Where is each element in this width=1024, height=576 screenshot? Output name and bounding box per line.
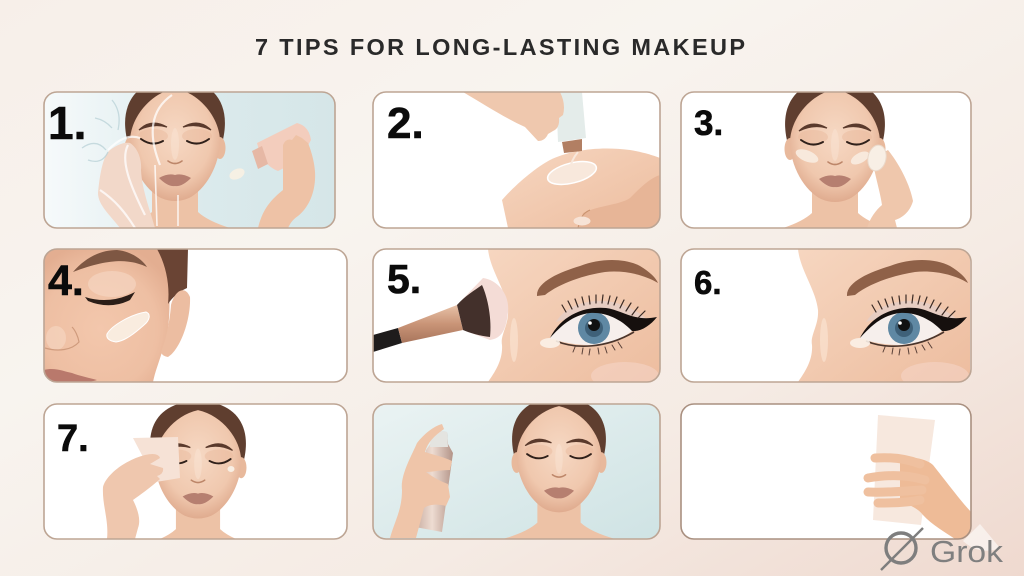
- number 7: 7.: [57, 418, 89, 460]
- serum bottle and drop: [228, 123, 311, 182]
- panel: tip 2 primer: [373, 92, 660, 228]
- panel: tip 7 blotting: [44, 400, 347, 548]
- number 6: 6.: [694, 264, 722, 301]
- title: 7 TIPS FOR LONG-LASTING MAKEUP: [255, 34, 745, 60]
- watermark: Grok: Grok: [930, 534, 1004, 569]
- fingers on tube: [463, 92, 564, 141]
- spray can: [415, 431, 453, 532]
- number 1: 1.: [48, 97, 86, 149]
- panel: tip 6 eyeliner: [681, 249, 971, 390]
- water splash and left hand: [82, 95, 178, 228]
- number 5: 5.: [387, 256, 421, 302]
- eye close-up: [488, 249, 660, 390]
- sponge: [867, 144, 887, 172]
- number 3: 3.: [694, 104, 723, 143]
- blotting sheet: [873, 415, 935, 525]
- highlight dot: [228, 466, 234, 472]
- woman's face: [150, 404, 246, 538]
- number 2: 2.: [387, 99, 424, 148]
- panel: blotting sheet: [681, 404, 971, 539]
- concealer patches: [796, 149, 868, 164]
- panel: tip 5 powder brush: [373, 249, 660, 390]
- eye close-up: [798, 249, 970, 390]
- watermark: Grok: [881, 524, 1004, 570]
- makeup brush: [373, 278, 508, 352]
- hand: [103, 454, 163, 539]
- forearm with primer swatch: [502, 148, 660, 228]
- side face: [44, 249, 190, 383]
- hand holding sheet: [868, 457, 971, 539]
- panel: tip 4 foundation: [44, 249, 347, 383]
- woman's face: [505, 404, 613, 538]
- hand: [867, 150, 913, 228]
- right hand: [258, 135, 315, 228]
- primer tube: [556, 92, 586, 153]
- blotting paper: [133, 437, 180, 482]
- panel: tip 1 cleanse: [44, 78, 335, 232]
- hand: [390, 424, 452, 538]
- woman's face: [125, 92, 228, 228]
- cream stroke: [107, 312, 149, 342]
- number 4: 4.: [48, 257, 84, 305]
- panel: setting spray: [373, 397, 660, 541]
- woman's face: [784, 92, 886, 228]
- panel: tip 3 concealer: [681, 79, 971, 233]
